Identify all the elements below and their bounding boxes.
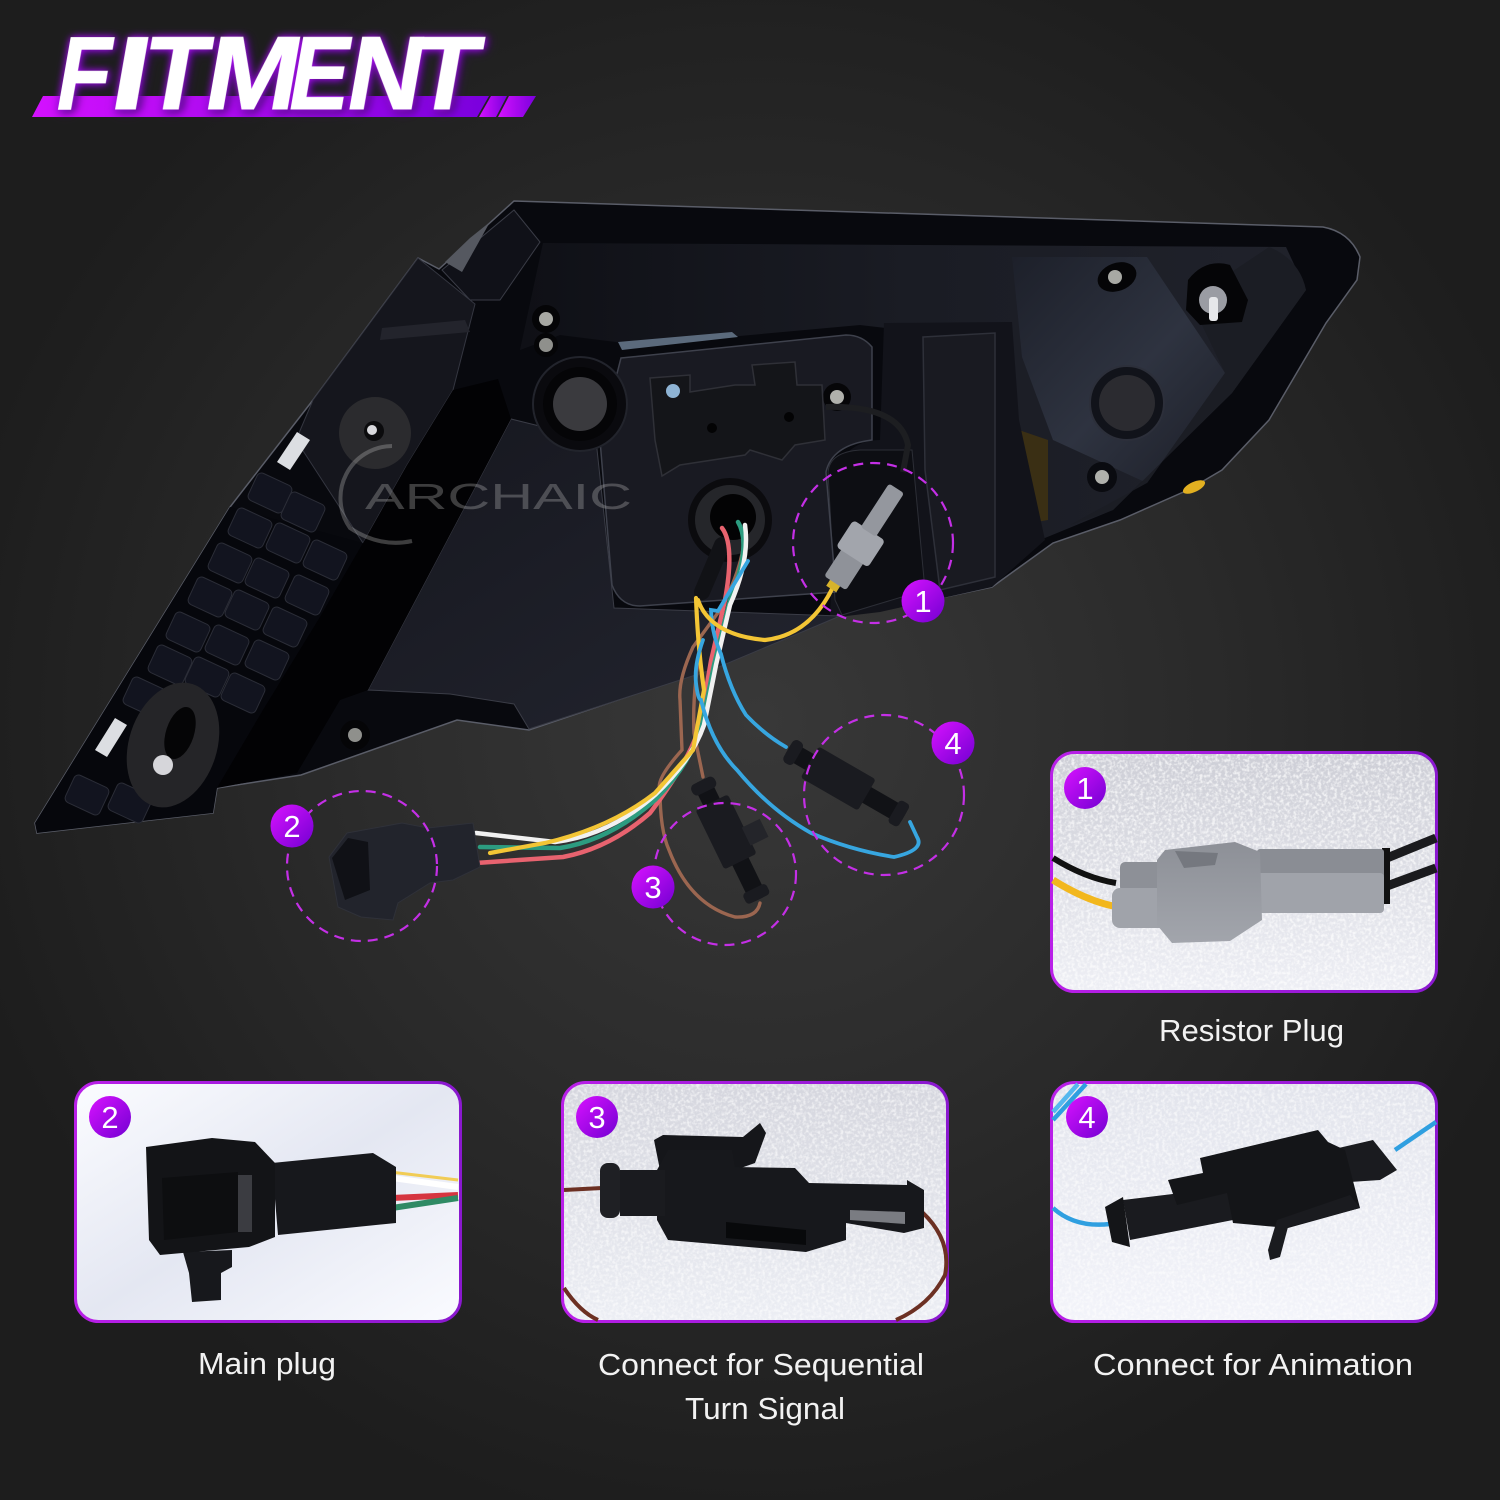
braided cables (1382, 838, 1436, 904)
connector 1 on lamp: resistor plug (815, 478, 913, 599)
white wire (476, 525, 746, 842)
card 1 foam texture (1053, 754, 1435, 990)
watermark (340, 446, 632, 543)
badge 2 on lamp (270, 804, 314, 848)
badge 2 on lamp: 2 (283, 809, 301, 844)
black and yellow wires (1053, 858, 1116, 906)
brown wire to connector 3 (659, 535, 760, 917)
fin highlight (380, 320, 470, 340)
wiring harness (476, 522, 919, 917)
second brown wire (694, 640, 703, 777)
grey connector body (1112, 842, 1384, 943)
lamp silhouette (35, 201, 1360, 833)
black cavity (217, 379, 511, 788)
label: resistor plug: Resistor Plug (1159, 1013, 1344, 1048)
blue wires (1053, 1084, 1436, 1225)
connector 3 on lamp (685, 765, 791, 907)
black connector body (600, 1123, 924, 1252)
badge 3 (576, 1096, 618, 1138)
callout circle 3 (654, 803, 796, 945)
watermark swoosh (340, 446, 412, 543)
badge 1 on lamp: 1 (914, 584, 932, 619)
connector recess (923, 333, 995, 590)
badge 4 on lamp (932, 722, 974, 764)
connector 4 on lamp (779, 734, 913, 832)
harness wires (390, 1172, 458, 1208)
yellow wire to resistor plug (698, 587, 833, 640)
title text: I (103, 15, 161, 131)
title text: T (406, 16, 490, 132)
left mounting fin (296, 258, 475, 543)
label sticker (618, 332, 738, 350)
black connector body (146, 1138, 396, 1302)
badge 3 on lamp (632, 866, 674, 908)
round plug left (533, 357, 627, 451)
yellow reflector spot (1181, 477, 1207, 497)
black connector body (1105, 1130, 1397, 1260)
panel: animation photo (1052, 1082, 1436, 1322)
badge 3 on lamp: 3 (644, 870, 662, 905)
title text (49, 14, 490, 132)
label: connect for sequential turn signal: Connect for Sequential (598, 1347, 924, 1382)
raised connector housing (830, 322, 1045, 618)
green wire (480, 522, 743, 848)
badge 2: 2 (101, 1100, 119, 1135)
watermark text: ARCHAIC (365, 476, 632, 517)
right lens rim band (1070, 247, 1306, 525)
photo card (1052, 1082, 1436, 1322)
title: FITMENT (32, 14, 536, 132)
callout circle 2 (287, 791, 437, 941)
photo card (1052, 752, 1436, 992)
label: connect for animation: Connect for Animation (1093, 1347, 1413, 1382)
title text: F (49, 16, 121, 132)
oval foam with rivet (111, 671, 235, 819)
photo card (76, 1082, 460, 1322)
resistor cable (826, 407, 908, 472)
fixing grid (35, 471, 363, 833)
callout circle 4 (804, 715, 964, 875)
centre plate (600, 335, 872, 606)
connector 2 on lamp: main plug (329, 823, 480, 920)
round plug right (1090, 366, 1164, 440)
badge 1 (1064, 767, 1106, 809)
badge 1 on lamp (902, 580, 944, 622)
corner housing facet (442, 210, 540, 300)
callout circle 1 (793, 463, 953, 623)
card 4 foam texture (1053, 1084, 1435, 1320)
foam disc with rivet (339, 397, 411, 469)
recess cavity (828, 450, 925, 615)
title text: M (197, 16, 311, 132)
lens panel (1012, 257, 1225, 483)
title text: N (339, 16, 435, 132)
label: main plug: Main plug (198, 1346, 336, 1381)
title text: E (281, 14, 361, 131)
panel: sequential turn signal photo (562, 1082, 948, 1322)
badge 2 (89, 1096, 131, 1138)
white tabs (95, 432, 310, 757)
screws (340, 257, 1141, 750)
badge 4: 4 (1078, 1100, 1096, 1135)
pink wire (476, 528, 729, 863)
panel: resistor plug photo (1052, 752, 1436, 992)
corner glare streak (445, 222, 490, 272)
upper housing panel (520, 243, 1306, 540)
title underline bar (32, 96, 536, 117)
badge 4 (1066, 1096, 1108, 1138)
panel: main plug photo (76, 1082, 460, 1322)
title text: T (135, 16, 219, 132)
label: connect for sequential turn signal (598, 1347, 924, 1426)
mounting stud with nut (1186, 263, 1248, 325)
lower body panel (368, 419, 840, 729)
card 3 foam texture (564, 1084, 946, 1320)
photo card (562, 1082, 948, 1322)
grommet (688, 478, 772, 562)
brown wires (564, 1188, 946, 1320)
amber tint (1019, 430, 1048, 525)
mounting bracket (650, 362, 825, 476)
badge 3: 3 (588, 1100, 606, 1135)
yellow wire to main plug (490, 598, 704, 853)
blue wire looping to connector 4 tail (696, 640, 919, 857)
label: connect for sequential turn signal: Turn Signal (685, 1391, 845, 1426)
tail light rear view (35, 201, 1360, 833)
wire sleeve (702, 545, 722, 592)
badge 1: 1 (1076, 771, 1094, 806)
blue wire to connector 4 (711, 561, 786, 747)
badge 4 on lamp: 4 (944, 726, 962, 761)
